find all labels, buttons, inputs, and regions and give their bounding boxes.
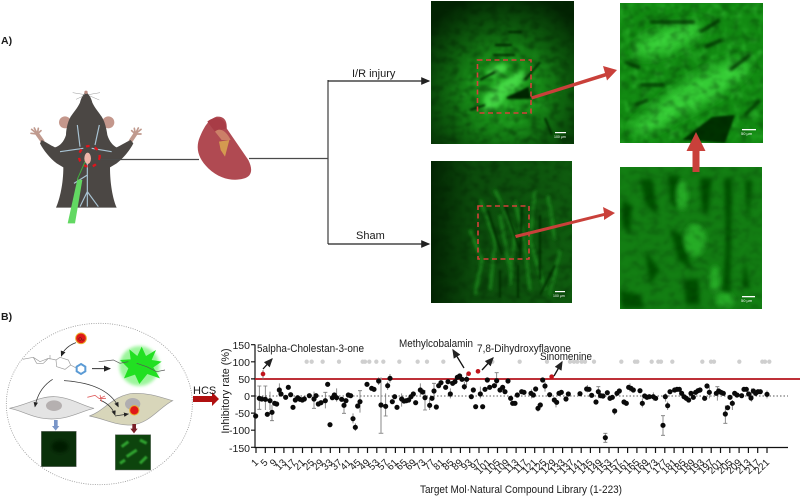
x axis labels: 101 <box>474 457 493 477</box>
x axis labels: 157 <box>604 457 623 477</box>
y axis labels: -100 <box>229 425 250 437</box>
x axis labels: 197 <box>697 457 716 477</box>
x axis labels: 61 <box>385 457 401 473</box>
arrow to I/R injury image <box>328 80 429 82</box>
arrow: dark red down <box>130 424 138 433</box>
x axis labels: 29 <box>311 457 326 473</box>
y axis labels: 0 <box>244 391 250 403</box>
y axis title: Inhibitory rate (%) <box>220 348 232 434</box>
x axis labels: 121 <box>520 457 540 477</box>
y axis labels: 50 <box>238 374 250 386</box>
dashed box on I/R injury image <box>478 60 531 113</box>
x axis labels: 41 <box>339 457 354 473</box>
image: normal cell fluorescence <box>41 431 76 467</box>
x axis labels: 201 <box>706 457 726 477</box>
x axis labels: 49 <box>357 457 373 473</box>
x axis labels: 173 <box>641 457 661 477</box>
x axis labels: 113 <box>502 457 522 476</box>
cell: injured <box>89 393 173 425</box>
icon: heart <box>198 117 251 180</box>
highlighted red points <box>263 371 552 377</box>
icon: fluorescent product glow <box>99 346 165 386</box>
x axis labels: 137 <box>558 457 577 477</box>
x axis labels: 85 <box>441 457 457 473</box>
arrow to Sham image <box>328 243 429 245</box>
grey high-value markers <box>307 355 769 368</box>
compound label: 5alpha-Cholestan-3-one: 5alpha-Cholestan-3-one <box>257 343 364 355</box>
y axis labels: -50 <box>235 408 250 420</box>
x axis labels: 17 <box>283 457 298 473</box>
x axis labels: 153 <box>595 457 615 477</box>
y axis labels: 150 <box>232 340 250 352</box>
x axis labels: 105 <box>483 457 503 477</box>
x axis labels: 221 <box>753 457 772 477</box>
x axis labels: 217 <box>743 457 763 477</box>
x axis labels: 209 <box>725 457 744 477</box>
compound label: 7,8-Dihydroxyflavone: 7,8-Dihydroxyflavone <box>477 343 571 355</box>
x axis labels: 117 <box>512 457 531 476</box>
x axis labels: 213 <box>734 457 754 477</box>
x axis labels: 21 <box>292 457 308 473</box>
zero reference line <box>255 395 788 397</box>
red arrow: Sham zoom up to I/R zoom <box>686 132 706 172</box>
panel label: B: B) <box>1 311 12 323</box>
chart: inhibitory rate scatter plot <box>220 338 800 496</box>
arrow: probe to fluorescent product <box>92 367 110 370</box>
x axis labels: 205 <box>716 457 735 477</box>
label: Sham: Sham <box>356 230 385 242</box>
x axis labels: 161 <box>613 457 633 477</box>
x axis labels: 169 <box>632 457 651 477</box>
panel label: A: A) <box>1 35 12 47</box>
x axis labels: 37 <box>329 457 345 473</box>
x axis labels: 97 <box>469 457 484 473</box>
x axis labels: 57 <box>376 457 391 473</box>
x axis labels: 73 <box>413 457 429 473</box>
icon: oxygen radical: O₂ <box>78 336 84 341</box>
arrow: radical to probe <box>61 343 76 356</box>
image: I/R injury fluorescence <box>431 1 574 144</box>
arrow: blue down <box>52 420 59 431</box>
x axis labels: 33 <box>320 457 336 473</box>
x axis labels: 89 <box>450 457 466 473</box>
x axis labels: 189 <box>678 457 698 477</box>
arrow: HCS <box>193 392 219 406</box>
compound label: Methylcobalamin: Methylcobalamin <box>399 338 473 350</box>
x axis labels: 1 <box>249 457 261 469</box>
image: injured cell fluorescence <box>115 435 151 470</box>
data points <box>256 376 767 438</box>
axes and ticks <box>251 344 788 453</box>
x axis labels: 149 <box>585 457 605 477</box>
callout arrows <box>263 350 562 376</box>
x axis labels: 93 <box>459 457 475 473</box>
x axis labels: 193 <box>688 457 707 477</box>
compound label: Sinomenine: Sinomenine <box>540 351 592 363</box>
image: I/R injury zoomed <box>620 3 763 143</box>
error bars <box>257 370 767 442</box>
scale label 100 µm: 100 µm <box>553 294 565 298</box>
molecule: probe <box>23 355 85 374</box>
y axis labels: 100 <box>232 357 250 369</box>
x axis title: Target Mol·Natural Compound Library (1-223) <box>420 484 622 496</box>
red arrow: I/R box to zoom <box>531 66 617 100</box>
dashed box on Sham image <box>478 206 529 259</box>
x axis labels: 141 <box>567 457 586 477</box>
image: Sham fluorescence <box>431 161 572 303</box>
x axis labels: 5 <box>259 457 271 469</box>
icon: inhibitor molecule <box>87 395 106 402</box>
x axis labels: 145 <box>576 457 596 477</box>
x axis labels: 181 <box>660 457 679 477</box>
scale label 50 µm: 50 µm <box>741 131 753 136</box>
x axis labels: 13 <box>274 457 289 473</box>
x axis labels: 25 <box>301 457 317 473</box>
x axis labels: 69 <box>404 457 419 473</box>
x axis labels: 185 <box>669 457 689 477</box>
label: I/R injury: I/R injury <box>352 68 396 80</box>
scale label 100 µm: 100 µm <box>554 135 566 139</box>
threshold line <box>255 378 800 380</box>
y axis labels: -150 <box>229 443 250 455</box>
label: HCS: HCS <box>193 385 216 397</box>
x axis labels: 109 <box>493 457 512 477</box>
image: Sham zoomed <box>620 167 762 309</box>
panel: HCS assay schematic <box>6 323 192 485</box>
x axis labels: 129 <box>539 457 558 477</box>
red arrow: Sham box to zoom <box>515 207 615 238</box>
x axis labels: 53 <box>366 457 382 473</box>
x axis labels <box>249 457 772 477</box>
connector lines from mouse through heart <box>100 80 328 244</box>
arrows into cells <box>35 379 128 416</box>
x axis labels: 45 <box>348 457 364 473</box>
x axis labels: 77 <box>422 457 438 473</box>
x axis labels: 133 <box>548 457 568 477</box>
x axis labels: 65 <box>394 457 410 473</box>
cell: normal <box>9 397 94 419</box>
y axis labels <box>229 340 250 455</box>
x axis labels: 81 <box>431 457 447 473</box>
x axis labels: 177 <box>651 457 670 477</box>
x axis labels: 9 <box>268 457 280 469</box>
x axis labels: 165 <box>623 457 642 477</box>
x axis labels: 125 <box>530 457 550 477</box>
icon: oxygen radical <box>76 333 86 344</box>
scale label 50 µm: 50 µm <box>741 298 753 303</box>
icon: mouse with red circle and green syringe <box>31 91 141 223</box>
